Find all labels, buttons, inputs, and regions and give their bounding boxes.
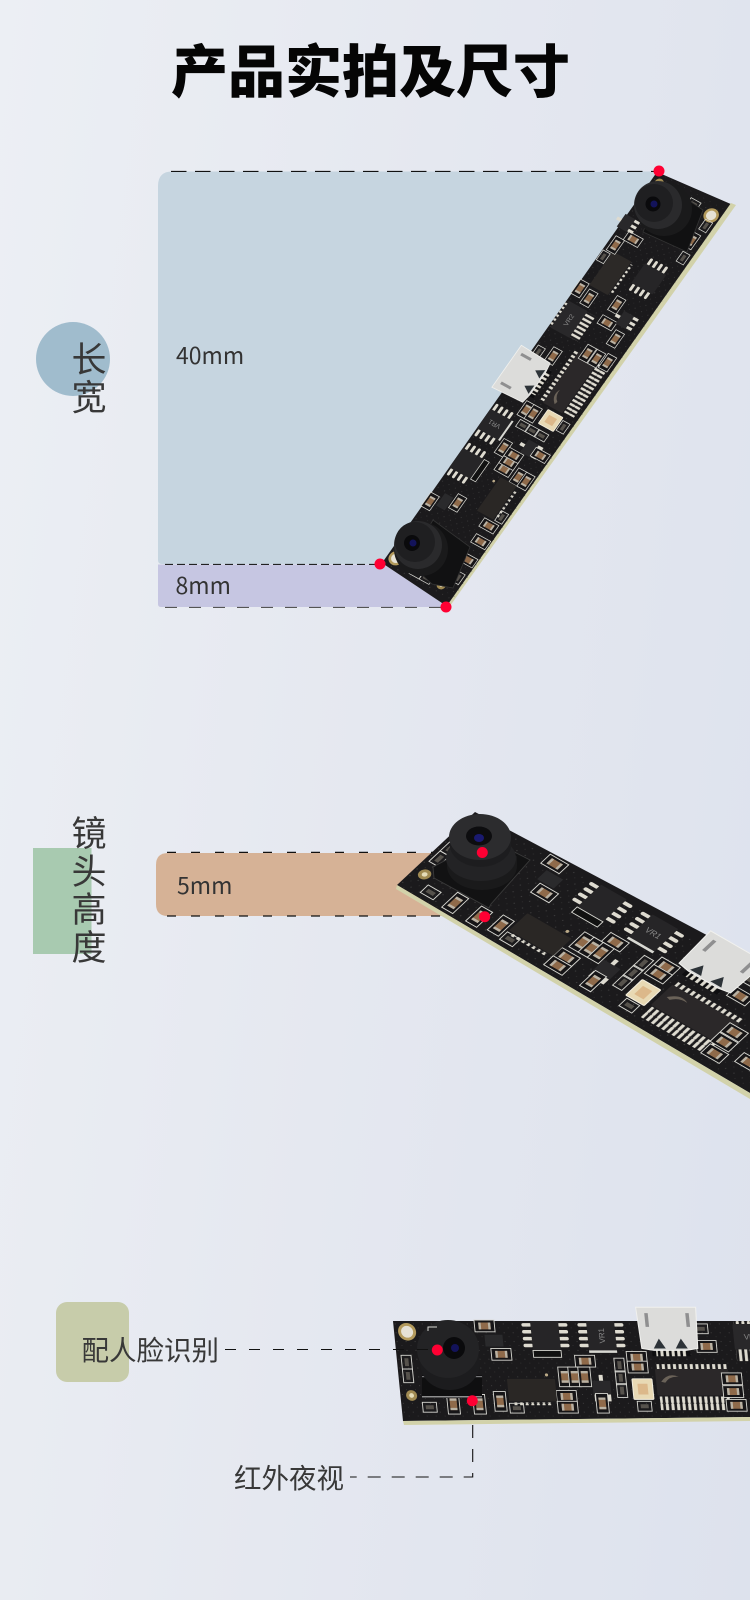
product board: angled top view: [372, 167, 736, 607]
marker: infrared sensor: [467, 1395, 478, 1406]
section: lens height: [33, 802, 750, 1182]
section label: lens height: 头: [71, 844, 107, 895]
callout line: infrared night vision: [350, 1425, 473, 1477]
product board: angled top view: VR1: [487, 417, 502, 429]
product board: side perspective view: [396, 802, 750, 1182]
dashed guide lines: [167, 852, 445, 916]
product board: front view: [392, 1307, 750, 1425]
section label: length width: [36, 322, 110, 421]
label: 5mm: 5mm: [177, 867, 232, 901]
panel: 8mm dimension area: [158, 564, 448, 607]
section label: length width: 宽: [71, 370, 107, 421]
callout line: face recognition: [225, 1348, 437, 1350]
panel: 5mm dimension area: [156, 853, 450, 916]
label: face recognition: 配人脸识别: [82, 1328, 219, 1368]
label: infrared night vision: 红外夜视: [234, 1456, 344, 1496]
section label: lens height: 度: [71, 920, 107, 971]
product board: angled top view: VR2: [563, 313, 576, 328]
section tag background: [56, 1302, 129, 1382]
section: sensors callouts: [56, 1302, 750, 1496]
section label: lens height: 镜: [71, 806, 107, 857]
marker: width top corner: [654, 166, 664, 176]
camera: raised lens: [433, 814, 530, 908]
marker: bottom corner: [440, 602, 452, 612]
marker: width bottom corner: [374, 558, 386, 570]
section label: lens height: [33, 806, 107, 971]
camera: near end: [394, 520, 470, 588]
product board: side perspective view: VR1: [642, 925, 664, 941]
title: 产品实拍及尺寸: [171, 27, 570, 109]
dashed guide lines: [165, 171, 659, 607]
panel: 40mm dimension area: [158, 172, 662, 564]
camera: far end: [634, 181, 703, 252]
product board: front view: VR1: [597, 1328, 607, 1343]
section label: length width: 长: [71, 332, 107, 383]
section label: lens height: 高: [71, 882, 107, 933]
label: 40mm: 40mm: [176, 337, 244, 371]
marker: lens top: [477, 847, 488, 858]
marker: lens base: [479, 911, 490, 922]
camera: front: [417, 1320, 482, 1398]
label: 8mm: 8mm: [176, 567, 231, 601]
marker: face recognition sensor: [432, 1344, 443, 1356]
section: length and width: [36, 166, 736, 612]
